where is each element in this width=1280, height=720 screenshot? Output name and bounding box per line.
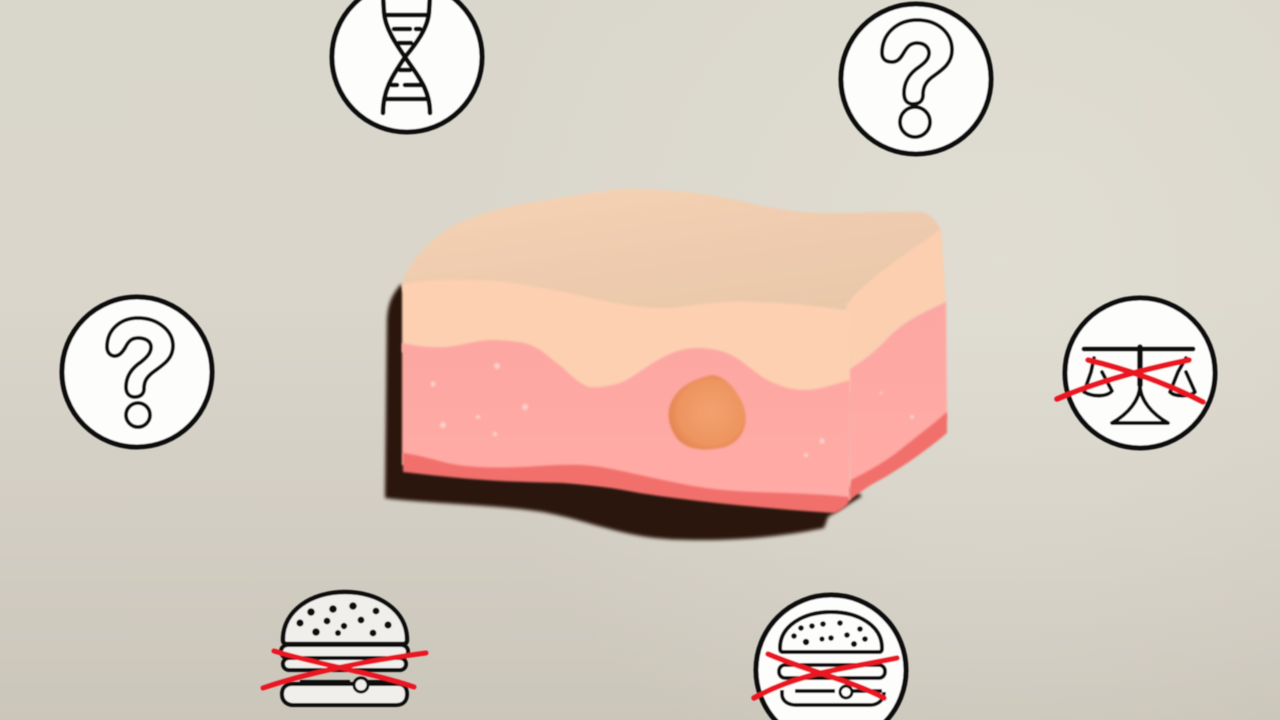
top bun — [283, 592, 407, 644]
skin pores — [430, 363, 914, 457]
right face base layer — [847, 412, 947, 503]
sesame seeds — [296, 602, 392, 636]
right face dermis — [848, 302, 947, 490]
burger layers — [281, 645, 408, 658]
sesame seeds — [791, 620, 868, 647]
icon: DNA helix — [332, 0, 482, 132]
icon: crossed-out burger right — [754, 595, 906, 720]
front face base layer — [403, 453, 849, 513]
red cross — [1057, 360, 1203, 402]
icon: crossed-out burger left — [263, 592, 426, 705]
red cross — [754, 654, 897, 698]
icon: question mark top right — [841, 4, 991, 154]
front face epidermis — [402, 280, 850, 400]
right face of skin — [846, 229, 947, 503]
block cast shadow — [385, 284, 862, 540]
burger layers — [779, 665, 885, 678]
icon: crossed-out balance scale — [1057, 298, 1215, 448]
top face of skin — [403, 189, 941, 320]
nodule — [669, 375, 746, 450]
front face dermis — [402, 340, 850, 500]
top bun — [780, 612, 882, 652]
red cross — [263, 651, 426, 688]
right face epidermis — [846, 229, 946, 372]
icon: question mark left — [62, 297, 212, 447]
illustration: skin block with nodule — [385, 189, 947, 540]
